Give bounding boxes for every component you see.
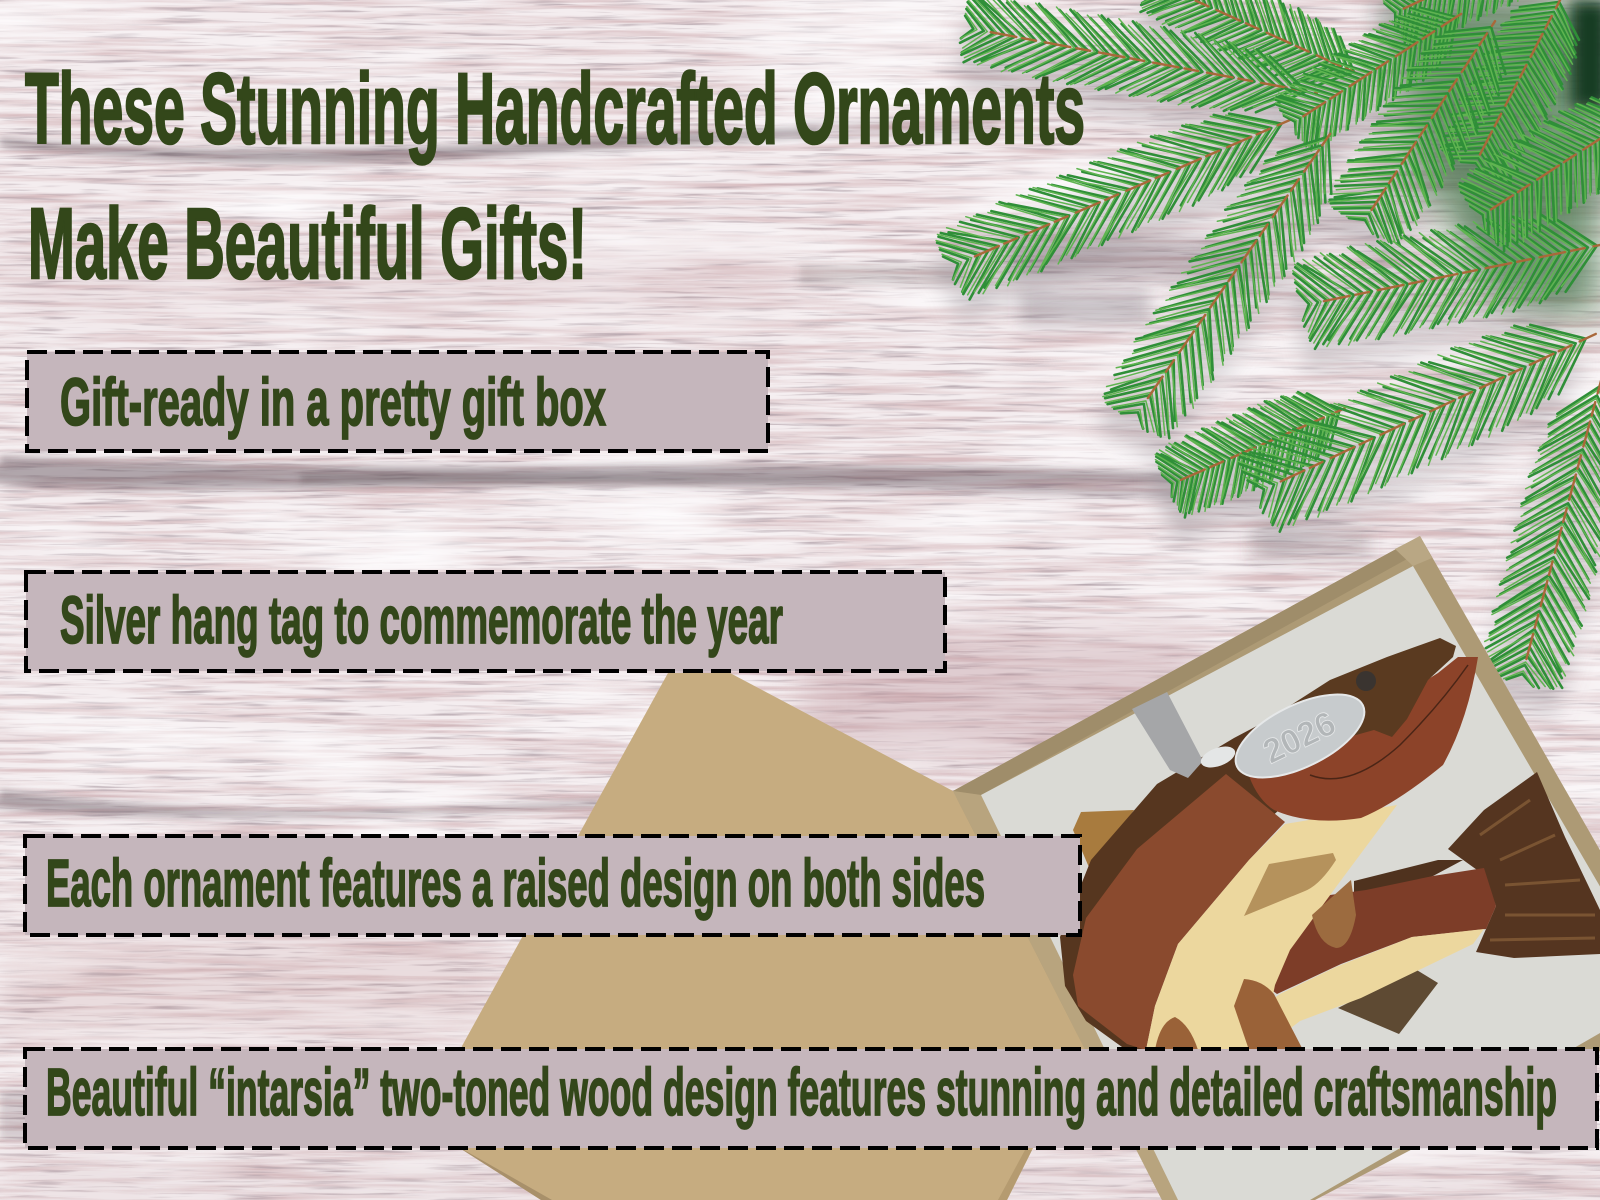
fin: ventral: [1312, 880, 1356, 948]
fin: pectoral: [1244, 853, 1336, 916]
year tag: [1223, 677, 1377, 795]
fin: lower belly: [1234, 979, 1303, 1050]
fin: lower small: [1155, 1017, 1198, 1050]
gift box base: [953, 536, 1600, 1200]
title: [25, 53, 1085, 300]
head red wood: [1249, 657, 1478, 821]
dark foliage depth behind branches: [1395, 0, 1600, 320]
callout: raised design: [25, 836, 1080, 935]
tail fin: [1448, 772, 1600, 958]
belly cream: [1146, 805, 1397, 1050]
tail belly strip: [1200, 929, 1484, 1050]
callout: gift box: [27, 352, 768, 451]
body red wood: [1073, 774, 1285, 1050]
head dark brow: [1240, 638, 1456, 745]
year tag: 2026: [1257, 704, 1342, 771]
callout: hang tag: [26, 572, 945, 671]
callout: hang tag: Silver hang tag to commemorate the year: [60, 583, 783, 658]
title: Make Beautiful Gifts!: [28, 188, 587, 300]
tail body: [1257, 868, 1496, 994]
callout: gift box: Gift-ready in a pretty gift box: [60, 365, 606, 440]
back dark wood: [1060, 671, 1361, 1060]
gift box lid: [458, 673, 1090, 1200]
eye: [1356, 671, 1376, 691]
fish ornament with year tag: [1060, 638, 1600, 1060]
pine branches: [932, 0, 1600, 695]
darker shading under the branches: [1010, 240, 1370, 560]
tail body top: [1354, 860, 1463, 905]
fin: anal: [1338, 969, 1438, 1034]
fin: dorsal: [1073, 810, 1134, 872]
gill line: [1310, 665, 1468, 779]
clasp: [1198, 742, 1238, 772]
ribbon: [1132, 692, 1203, 778]
pine branch shadows: [928, 0, 1600, 721]
